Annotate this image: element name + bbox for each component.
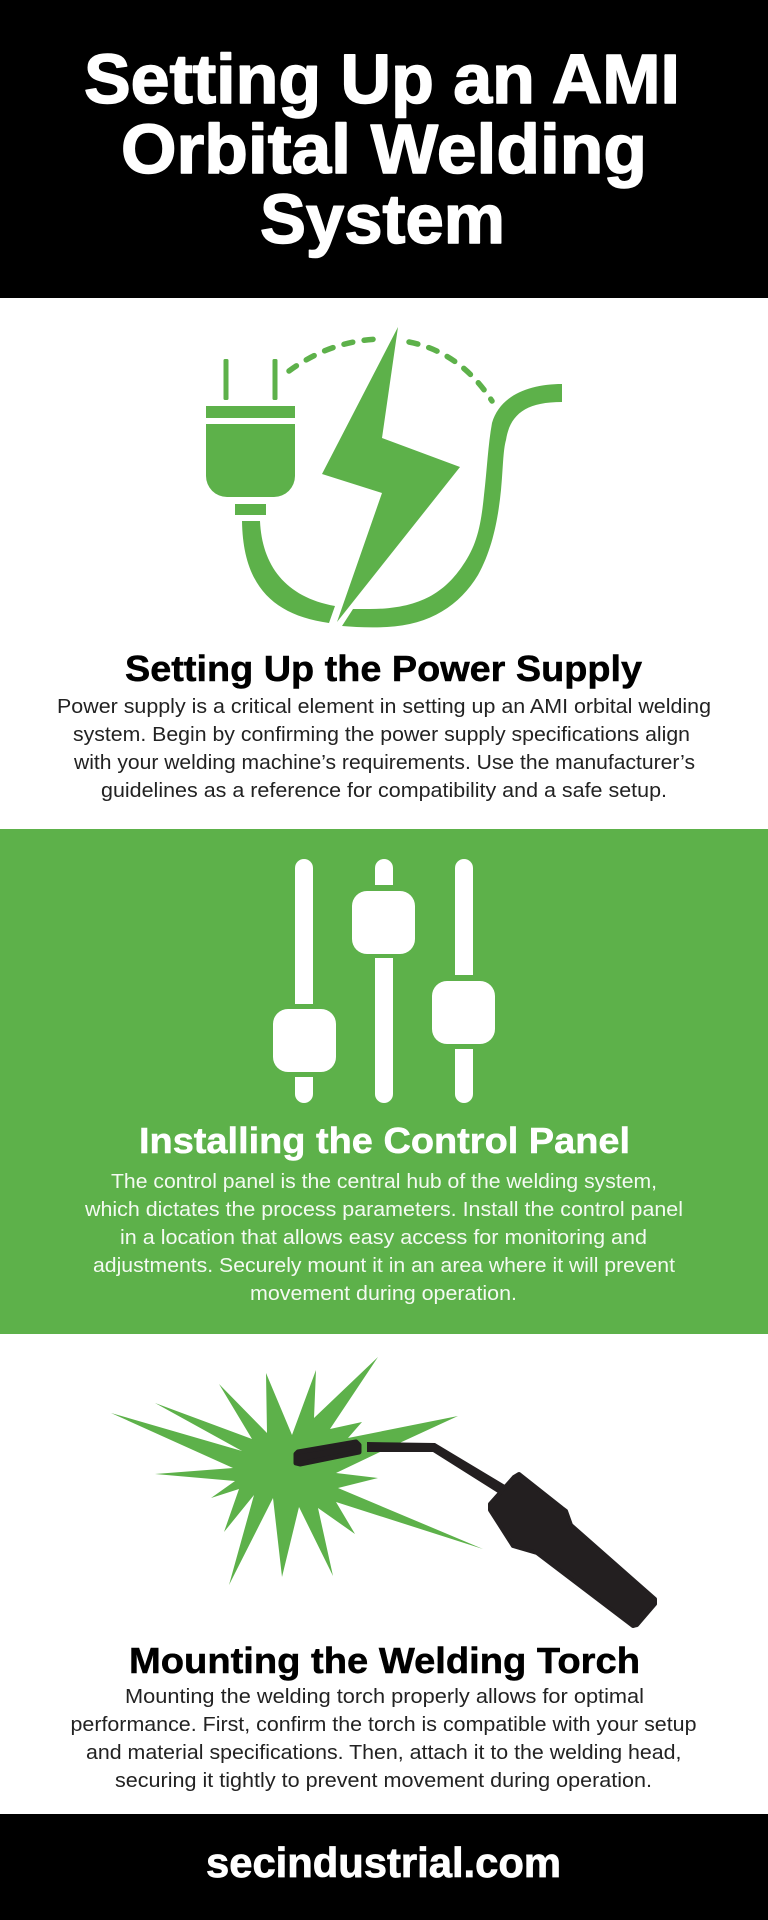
icon: welding torch [296, 1442, 655, 1626]
text block: welding torch [70, 1685, 696, 1792]
text block: power supply: system. Begin by confirming the power supply specifications align [73, 723, 690, 746]
text block: power supply: Power supply is a critical element in setting up an AMI orbital welding [57, 695, 711, 718]
panel: power supply [0, 298, 768, 829]
text block: control panel: The control panel is the central hub of the welding system, [111, 1170, 657, 1193]
text block: welding torch: Mounting the welding torch properly allows for optimal [125, 1685, 644, 1708]
panel: title banner [0, 0, 768, 298]
panel: welding torch [0, 1334, 768, 1814]
title: Orbital Welding [121, 110, 647, 188]
text block: welding torch: securing it tightly to prevent movement during operation. [115, 1769, 652, 1792]
title: Setting Up an AMI [84, 40, 680, 118]
title: System [260, 180, 505, 258]
title [84, 40, 680, 258]
heading: welding torch: Mounting the Welding Torch [129, 1640, 640, 1681]
text block: control panel: adjustments. Securely mount it in an area where it will prevent [93, 1254, 675, 1277]
text block: welding torch: performance. First, confirm the torch is compatible with your setup [70, 1713, 696, 1736]
text block: control panel: in a location that allows easy access for monitoring and [120, 1226, 647, 1249]
heading: power supply: Setting Up the Power Supply [125, 648, 642, 689]
text block: power supply: with your welding machine’s requirements. Use the manufacturer’s [73, 751, 695, 774]
icon: welding spark [111, 1357, 483, 1585]
text block: welding torch: and material specifications. Then, attach it to the welding head, [86, 1741, 682, 1764]
text block: control panel: movement during operation. [250, 1282, 517, 1305]
icon: sliders [273, 859, 495, 1103]
heading: control panel: Installing the Control Panel [139, 1120, 630, 1161]
footer url: secindustrial.com [206, 1839, 561, 1886]
panel: footer [0, 1814, 768, 1920]
text block: power supply: guidelines as a reference for compatibility and a safe setup. [101, 779, 667, 802]
text block: power supply [57, 695, 711, 802]
text block: control panel [84, 1170, 683, 1305]
panel: control panel [0, 829, 768, 1334]
text block: control panel: which dictates the process parameters. Install the control panel [84, 1198, 683, 1221]
icon: plug with lightning bolt [206, 327, 562, 627]
